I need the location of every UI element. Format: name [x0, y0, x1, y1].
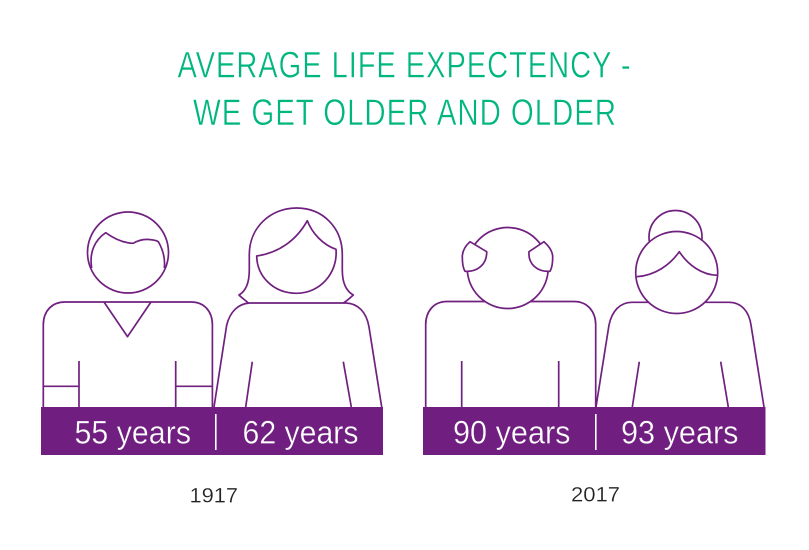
value bar 2017 — [423, 407, 766, 455]
figure: woman 2017 — [596, 210, 764, 407]
figure: man 2017 — [426, 228, 596, 407]
figure: man 1917 — [43, 212, 212, 407]
title — [178, 44, 632, 133]
value bar 2017: 93 years — [621, 414, 738, 450]
title: AVERAGE LIFE EXPECTENCY - — [178, 44, 632, 86]
figure: woman 1917 — [214, 208, 382, 407]
panel: 2017 — [423, 210, 766, 506]
value bar 1917: 62 years — [242, 414, 358, 450]
panel: 1917 — [41, 208, 383, 508]
year label 1917: 1917 — [190, 484, 238, 508]
title: WE GET OLDER AND OLDER — [193, 92, 617, 133]
value bar 2017: 90 years — [453, 414, 570, 450]
value bar 1917: 55 years — [74, 414, 191, 450]
year label 2017: 2017 — [571, 484, 620, 506]
value bar 1917 — [41, 407, 383, 455]
